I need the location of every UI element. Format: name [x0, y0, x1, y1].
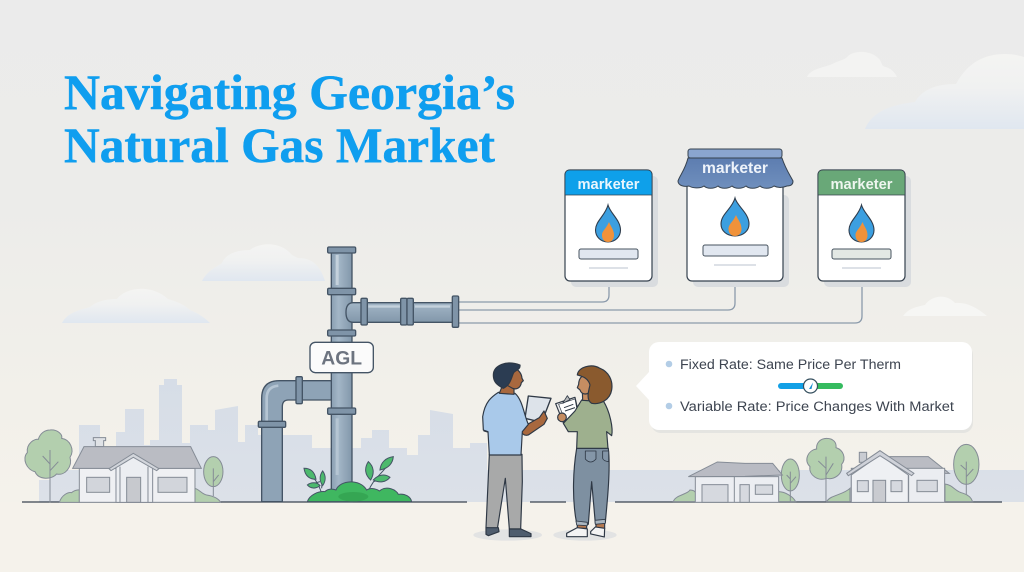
- icon: flame: [849, 205, 874, 242]
- pipeline with AGL: [258, 247, 459, 502]
- upper horizontal pipe: [346, 296, 459, 327]
- tree: small left: [204, 457, 223, 496]
- cloud: far left: [62, 289, 210, 323]
- cloud: centre left: [202, 244, 331, 281]
- lower elbow pipe: [258, 377, 337, 502]
- icon: flame: [721, 198, 749, 236]
- AGL label: AGL: [321, 349, 362, 370]
- price bar: [832, 249, 891, 259]
- tree: large left: [25, 430, 72, 502]
- card header: [818, 170, 905, 195]
- icon: flame: [596, 205, 620, 242]
- marketer card: storefront: [678, 149, 793, 287]
- right houses and trees: [673, 438, 979, 502]
- marketer card: green: [818, 170, 911, 287]
- slider: [778, 379, 843, 393]
- card name: marketer: [702, 160, 768, 177]
- cloud: right small: [903, 297, 987, 316]
- fixed rate text: Fixed Rate: Same Price Per Therm: [680, 357, 901, 372]
- skyline: [39, 379, 1024, 502]
- main vertical pipe: [328, 247, 356, 502]
- chimney: [93, 438, 106, 447]
- roof: [73, 447, 201, 468]
- price bar: [703, 245, 768, 256]
- main house: [847, 451, 949, 502]
- shrubs: [59, 488, 221, 502]
- shrubs: [673, 484, 973, 502]
- variable rate text: Variable Rate: Price Changes With Market: [680, 399, 954, 414]
- card name: marketer: [578, 176, 640, 193]
- shadows: [473, 529, 617, 541]
- marketer card: blue: [565, 170, 658, 287]
- thin connector lines: [459, 281, 862, 323]
- card header: [565, 170, 652, 195]
- title: Natural Gas Market: [64, 117, 495, 173]
- bullet: [666, 403, 672, 409]
- door: [127, 477, 141, 502]
- ground line: [22, 501, 1002, 503]
- cloud: top right large: [865, 54, 1024, 129]
- ground band: [0, 502, 1024, 572]
- title: [64, 64, 515, 173]
- price bar: [579, 249, 638, 259]
- cloud: top small: [807, 52, 897, 77]
- tree: small: [781, 459, 799, 502]
- left house and trees: [25, 430, 223, 502]
- tree: right: [954, 444, 979, 494]
- awning top bar: [688, 149, 782, 158]
- man: [483, 363, 551, 537]
- bullet: [666, 361, 672, 367]
- AGL label: [310, 342, 373, 373]
- house body: [79, 468, 195, 502]
- rate callout: [636, 342, 973, 433]
- title: Navigating Georgia’s: [64, 64, 515, 120]
- woman: [556, 366, 612, 537]
- gable: [116, 456, 153, 502]
- awning: [678, 158, 793, 188]
- garage house: [688, 462, 782, 502]
- bush and leaves: [304, 457, 412, 502]
- windows: [87, 477, 110, 492]
- people: [473, 363, 617, 541]
- tree: large: [807, 438, 844, 502]
- card name: marketer: [830, 176, 893, 193]
